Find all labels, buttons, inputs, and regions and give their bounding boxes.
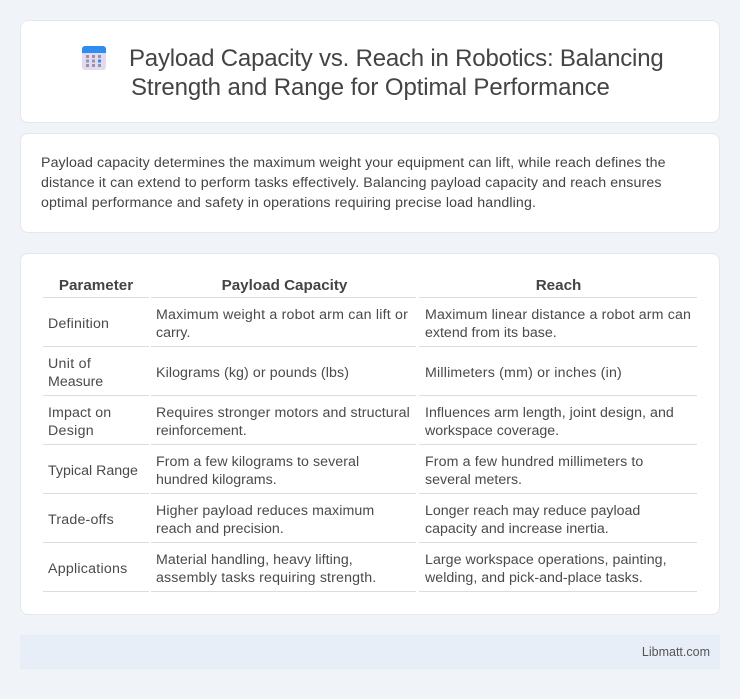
cell: Range payload [156, 454, 359, 488]
cell: Impact reach: workspace coverage. [425, 423, 559, 439]
text block: introduction: distance it can extend to perform tasks effectively. Balancing payload capacity and reach ensures [41, 175, 662, 191]
cell: Unit payload: Kilograms (kg) or pounds (lbs) [156, 365, 349, 381]
row: Impact on Design [48, 405, 111, 439]
cell: Range reach [425, 454, 643, 488]
cell: Definition reach [425, 307, 691, 341]
row: Unit of Measure: Measure [48, 374, 103, 390]
row: Trade-offs: Trade-offs [48, 512, 114, 528]
cell: Impact payload [156, 405, 410, 439]
cell: Range payload: From a few kilograms to several [156, 454, 359, 470]
cell: Trade-offs payload [156, 503, 374, 537]
row: Unit of Measure: Unit of [48, 356, 91, 372]
title: Strength and Range for Optimal Performance [131, 74, 610, 100]
panel: comparison table card [20, 253, 720, 615]
cell: Applications payload: assembly tasks requiring strength. [156, 570, 376, 586]
cell: Range payload: hundred kilograms. [156, 472, 277, 488]
footer bar [20, 635, 720, 669]
cell: Applications payload: Material handling, heavy lifting, [156, 552, 353, 568]
text block: introduction: Payload capacity determines the maximum weight your equipment can lift, while reach defines the [41, 155, 666, 171]
row: Applications: Applications [48, 561, 128, 577]
row: Definition: Definition [48, 316, 109, 332]
cell: Impact payload: reinforcement. [156, 423, 247, 439]
cell: Impact reach [425, 405, 674, 439]
cell: Range reach: several meters. [425, 472, 522, 488]
table header: Payload Capacity: Payload Capacity [222, 277, 347, 294]
title [129, 45, 664, 100]
cell: Unit reach: Millimeters (mm) or inches (in) [425, 365, 622, 381]
cell: Impact reach: Influences arm length, joint design, and [425, 405, 674, 421]
cell: Applications reach: Large workspace operations, painting, [425, 552, 667, 568]
cell: Definition payload: carry. [156, 325, 190, 341]
table header: Reach: Reach [536, 277, 581, 294]
cell: Trade-offs reach [425, 503, 640, 537]
panel: introduction card [20, 133, 720, 233]
title: Payload Capacity vs. Reach in Robotics: Balancing [129, 45, 664, 72]
row: Impact on Design: Impact on [48, 405, 111, 421]
row: Typical Range: Typical Range [48, 463, 138, 479]
text block: introduction [41, 155, 666, 211]
text block: introduction: optimal performance and safety in operations requiring precise load handling. [41, 195, 536, 211]
table header: Parameter: Parameter [59, 277, 133, 294]
cell: Trade-offs payload: reach and precision. [156, 521, 284, 537]
cell: Definition payload: Maximum weight a robot arm can lift or [156, 307, 408, 323]
cell: Definition reach: Maximum linear distance a robot arm can [425, 307, 691, 323]
cell: Range reach: From a few hundred millimeters to [425, 454, 643, 470]
cell: Applications reach: welding, and pick-and-place tasks. [425, 570, 643, 586]
cell: Trade-offs reach: Longer reach may reduce payload [425, 503, 640, 519]
cell: Trade-offs payload: Higher payload reduces maximum [156, 503, 374, 519]
cell: Impact payload: Requires stronger motors and structural [156, 405, 410, 421]
cell: Applications reach [425, 552, 667, 586]
panel: title card [20, 20, 720, 123]
footer credit: Libmatt.com [642, 645, 710, 659]
icon: calendar grid [82, 46, 106, 70]
row: Unit of Measure [48, 356, 103, 390]
cell: Trade-offs reach: capacity and increase inertia. [425, 521, 609, 537]
cell: Definition reach: extend from its base. [425, 325, 557, 341]
row: Impact on Design: Design [48, 423, 94, 439]
cell: Applications payload [156, 552, 376, 586]
cell: Definition payload [156, 307, 408, 341]
